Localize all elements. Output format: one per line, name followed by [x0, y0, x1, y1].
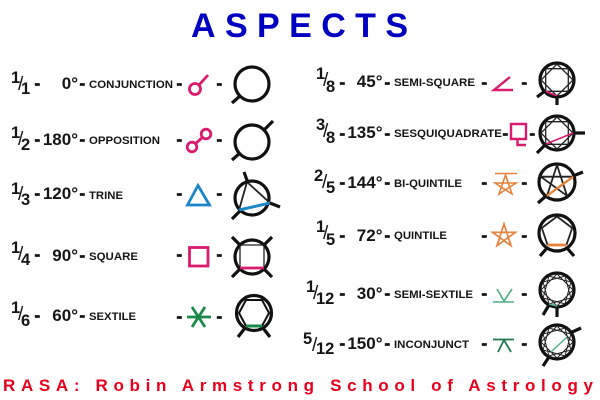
fraction 1/12: 12: [316, 290, 334, 308]
row: inconjunct: -: [522, 334, 527, 353]
row: semi-sextile: [306, 273, 574, 317]
icon: sextile glyph: [187, 307, 211, 327]
icon: quintile wheel: [539, 215, 575, 256]
fraction 1/3: [11, 180, 30, 209]
label opposition: OPPOSITION: [89, 135, 160, 147]
row: square: -: [80, 246, 85, 265]
row: sextile: -: [34, 306, 40, 325]
row: sextile: -: [216, 307, 222, 326]
row: bi-quintile: [314, 164, 583, 203]
row: opposition: -: [176, 130, 182, 149]
fraction 1/5: 5: [326, 231, 335, 249]
fraction 1/8: /: [323, 70, 329, 91]
row: semi-square: -: [482, 73, 487, 92]
row: bi-quintile: -: [340, 173, 345, 192]
icon: inconjunct glyph: [493, 340, 514, 352]
icon: semi-square glyph: [494, 77, 513, 90]
icon: bi-quintile glyph: [495, 174, 517, 194]
row: sesquiquadrate: -: [502, 124, 508, 143]
fraction 1/8: 8: [326, 78, 335, 96]
label sextile: SEXTILE: [89, 311, 136, 323]
fraction 1/6: 6: [21, 312, 30, 330]
label conjunction: CONJUNCTION: [89, 79, 173, 91]
row: opposition: -: [34, 130, 40, 149]
icon: square glyph: [190, 248, 208, 266]
fraction 3/8: 8: [326, 129, 335, 147]
fraction 1/8: [316, 65, 335, 96]
row: square: -: [34, 245, 40, 264]
row: conjunction: -: [216, 74, 222, 93]
icon: trine wheel: [232, 172, 280, 219]
label semi-sextile: SEMI-SEXTILE: [394, 289, 473, 301]
fraction 1/1: 1: [11, 69, 20, 87]
icon: semi-square wheel: [537, 63, 574, 105]
fraction 1/3: /: [18, 184, 24, 205]
fraction 1/4: /: [18, 244, 24, 265]
row: quintile: -: [482, 226, 487, 245]
row: inconjunct: [303, 325, 581, 366]
fraction 1/4: [11, 239, 31, 269]
degrees 72: 72°: [357, 226, 383, 245]
label bi-quintile: BI-QUINTILE: [394, 178, 462, 190]
row: quintile: [316, 215, 575, 256]
label inconjunct: INCONJUNCT: [394, 339, 469, 351]
degrees 60: 60°: [52, 306, 78, 325]
icon: quintile glyph: [493, 224, 515, 246]
label square: SQUARE: [89, 251, 138, 263]
fraction 1/2: 2: [21, 136, 30, 154]
row: sextile: -: [80, 306, 85, 325]
degrees 0: 0°: [62, 74, 78, 93]
fraction 5/12: [303, 330, 334, 358]
fraction 3/8: /: [323, 121, 329, 142]
row: inconjunct: -: [340, 334, 345, 353]
label trine: TRINE: [89, 190, 123, 202]
icon: opposition glyph: [187, 129, 211, 152]
row: quintile: -: [522, 226, 527, 245]
degrees 150: 150°: [347, 334, 383, 353]
row: trine: [11, 172, 280, 219]
fraction 1/5: 1: [316, 218, 325, 236]
fraction 2/5: 5: [326, 179, 335, 197]
row: trine: -: [34, 184, 40, 203]
fraction 1/1: 1: [21, 80, 30, 98]
fraction 1/8: 1: [316, 65, 325, 83]
icon: conjunction wheel: [232, 67, 269, 103]
label sesquiquadrate: SESQUIQUADRATE: [394, 128, 502, 140]
fraction 5/12: /: [312, 335, 318, 356]
fraction 1/2: 1: [11, 124, 20, 142]
row: square: -: [216, 245, 222, 264]
fraction 5/12: 12: [316, 340, 334, 358]
row: sextile: -: [176, 307, 182, 326]
degrees 90: 90°: [52, 246, 78, 265]
fraction 1/12: [306, 278, 334, 308]
row: semi-square: [316, 63, 574, 105]
degrees 180: 180°: [43, 130, 78, 149]
row: square: [11, 237, 272, 277]
row: inconjunct: -: [482, 334, 487, 353]
fraction 2/5: /: [322, 172, 328, 193]
row: sextile: [11, 296, 272, 337]
icon: opposition wheel: [232, 121, 273, 160]
row: quintile: -: [384, 226, 390, 245]
icon: square wheel: [232, 237, 272, 277]
degrees 45: 45°: [357, 72, 383, 91]
row: bi-quintile: -: [384, 173, 390, 192]
row: sesquiquadrate: -: [384, 124, 390, 143]
fraction 1/12: 1: [306, 278, 315, 296]
degrees 120: 120°: [43, 184, 78, 203]
row: opposition: -: [216, 130, 222, 149]
row: trine: -: [216, 184, 222, 203]
title: ASPECTS: [191, 7, 408, 45]
fraction 3/8: 3: [316, 116, 325, 134]
fraction 1/5: /: [323, 223, 329, 244]
row: sesquiquadrate: [316, 116, 585, 153]
row: sesquiquadrate: -: [340, 124, 345, 143]
footer: RASA: Robin Armstrong School of Astrology: [3, 376, 594, 395]
icon: sesquiquadrate wheel: [537, 116, 585, 153]
icon: inconjunct wheel: [540, 325, 581, 366]
row: trine: -: [80, 184, 85, 203]
fraction 1/2: [11, 124, 30, 154]
row: semi-sextile: -: [384, 284, 390, 303]
fraction 1/6: /: [18, 304, 24, 325]
fraction 1/3: 1: [11, 180, 20, 198]
fraction 1/1: [11, 69, 30, 98]
fraction 1/4: 1: [11, 239, 20, 257]
icon: semi-sextile glyph: [493, 289, 514, 302]
icon: sesquiquadrate glyph: [511, 124, 526, 145]
degrees 30: 30°: [357, 284, 383, 303]
fraction 1/12: /: [313, 283, 319, 304]
row: conjunction: -: [80, 74, 85, 93]
fraction 3/8: [316, 116, 335, 147]
row: semi-square: -: [384, 73, 390, 92]
row: semi-sextile: -: [522, 284, 527, 303]
row: bi-quintile: -: [482, 173, 487, 192]
row: conjunction: [11, 67, 269, 103]
row: bi-quintile: -: [522, 173, 527, 192]
label semi-square: SEMI-SQUARE: [394, 77, 475, 89]
row: semi-square: -: [522, 73, 527, 92]
row: trine: -: [176, 184, 182, 203]
icon: trine glyph: [188, 186, 210, 205]
fraction 1/6: [11, 299, 30, 330]
fraction 1/6: 1: [11, 299, 20, 317]
row: square: -: [176, 245, 182, 264]
label quintile: QUINTILE: [394, 230, 447, 242]
row: semi-square: -: [340, 73, 345, 92]
degrees 144: 144°: [347, 173, 383, 192]
row: inconjunct: -: [384, 334, 390, 353]
fraction 2/5: 2: [314, 167, 323, 185]
row: conjunction: -: [176, 74, 182, 93]
row: semi-sextile: -: [482, 284, 487, 303]
row: semi-sextile: -: [340, 284, 345, 303]
fraction 1/5: [316, 218, 335, 249]
fraction 1/3: 3: [21, 191, 30, 209]
fraction 1/4: 4: [21, 251, 31, 269]
fraction 5/12: 5: [303, 330, 312, 348]
icon: conjunction glyph: [190, 75, 208, 94]
fraction 1/1: /: [18, 74, 24, 95]
icon: sextile wheel: [236, 296, 272, 337]
row: conjunction: -: [34, 74, 40, 93]
icon: semi-sextile wheel: [540, 273, 574, 317]
row: opposition: [11, 121, 273, 160]
fraction 2/5: [314, 167, 335, 197]
row: quintile: -: [340, 226, 345, 245]
degrees 135: 135°: [347, 123, 383, 142]
row: opposition: -: [80, 130, 85, 149]
icon: bi-quintile wheel: [538, 164, 583, 203]
fraction 1/2: /: [18, 129, 24, 150]
row: sesquiquadrate: -: [530, 124, 535, 143]
